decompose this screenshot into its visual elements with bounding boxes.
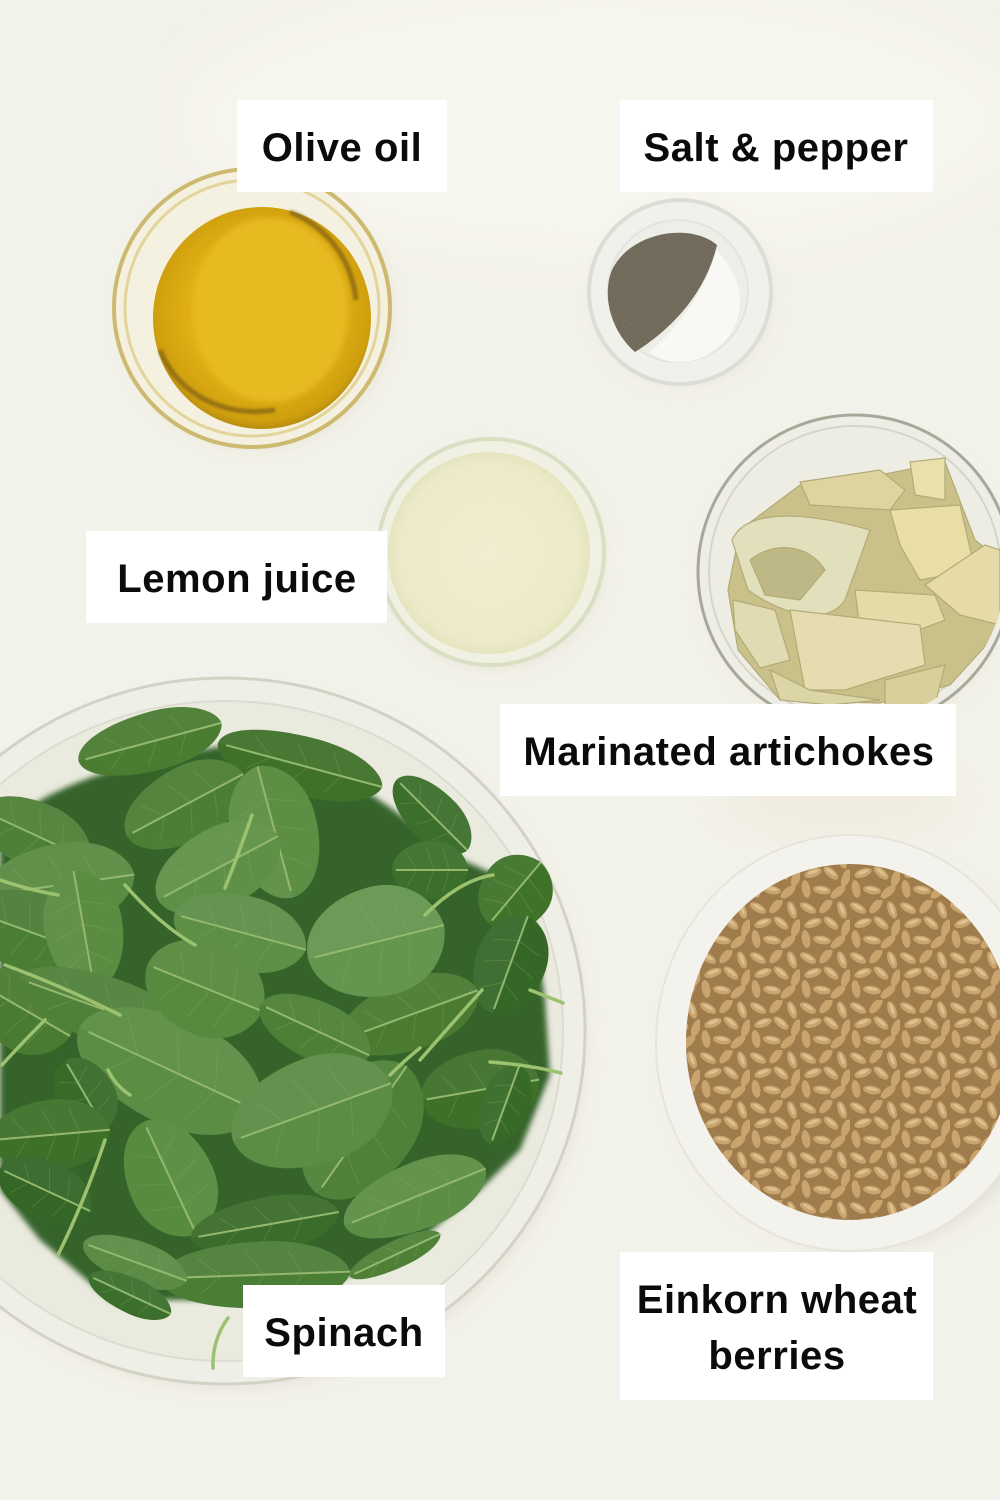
label: einkorn wheat berries: berries (708, 1334, 846, 1378)
olive oil liquid (153, 207, 371, 429)
label: spinach: Spinach (264, 1311, 424, 1355)
label: lemon juice (86, 531, 387, 623)
panel: lemon juice bowl (378, 439, 604, 668)
wheat berries (686, 864, 1000, 1220)
spinach stems (0, 815, 563, 1368)
label: lemon juice: Lemon juice (117, 557, 357, 601)
label: olive oil (237, 100, 447, 192)
label: einkorn wheat berries (620, 1252, 933, 1400)
artichoke pieces (728, 458, 1000, 705)
panel: marinated artichokes bowl (698, 415, 1000, 729)
label: spinach (243, 1285, 445, 1377)
salt (650, 250, 740, 362)
label: salt and pepper (620, 100, 933, 192)
label: marinated artichokes: Marinated artichokes (523, 730, 935, 774)
spinach leaves (0, 694, 568, 1330)
label: einkorn wheat berries: Einkorn wheat (637, 1278, 917, 1322)
panel: olive oil bowl (114, 169, 392, 448)
pepper (608, 233, 717, 352)
panel: spinach bowl (0, 678, 585, 1387)
panel: salt and pepper bowl (589, 200, 771, 384)
label: marinated artichokes (500, 704, 956, 796)
lemon juice liquid (388, 452, 590, 654)
spinach dark base (0, 745, 550, 1300)
label: salt and pepper: Salt & pepper (644, 126, 908, 170)
panel: einkorn wheat berries bowl (656, 835, 1000, 1251)
label: olive oil: Olive oil (262, 126, 422, 170)
